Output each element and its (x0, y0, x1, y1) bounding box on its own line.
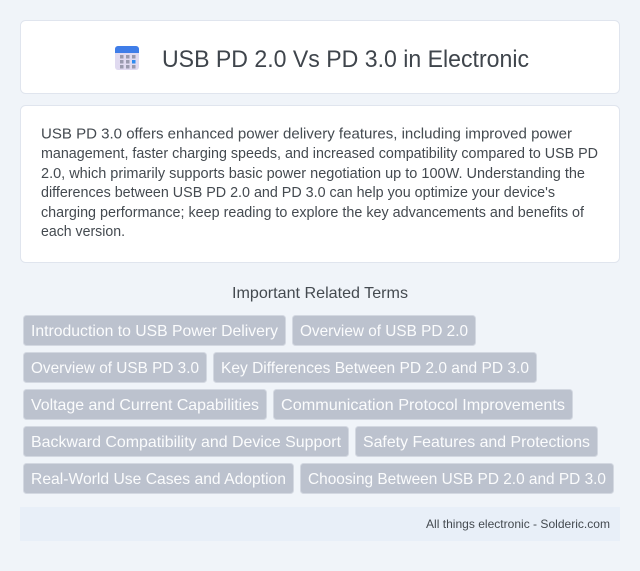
term chip: Choosing Between USB PD 2.0 and PD 3.0 (308, 471, 606, 488)
terms list (24, 316, 614, 494)
term chip (24, 426, 348, 456)
summary text (41, 126, 598, 240)
term chip: Introduction to USB Power Delivery (31, 323, 278, 340)
term chip: Communication Protocol Improvements (281, 397, 565, 414)
term chip (214, 352, 536, 382)
summary text: each version. (41, 224, 125, 240)
term chip (292, 316, 476, 346)
term chip (24, 352, 206, 382)
term chip: Overview of USB PD 3.0 (31, 360, 199, 377)
term chip (24, 464, 294, 494)
summary text: USB PD 3.0 offers enhanced power delivery features, including improved power (41, 126, 572, 142)
term chip: Safety Features and Protections (363, 434, 590, 451)
term chip: Real-World Use Cases and Adoption (31, 471, 286, 488)
summary text: differences between USB PD 2.0 and PD 3.0 can help you optimize your device's (41, 185, 555, 201)
summary text: 2.0, which primarily supports basic power negotiation up to 100W. Understanding the (41, 166, 585, 182)
summary text: charging performance; keep reading to explore the key advancements and benefits of (41, 205, 585, 221)
term chip (356, 426, 598, 456)
term chip: Voltage and Current Capabilities (31, 397, 259, 414)
heading: related terms: Important Related Terms (232, 285, 408, 302)
term chip: Overview of USB PD 2.0 (300, 323, 468, 340)
summary text: management, faster charging speeds, and increased compatibility compared to USB PD (41, 146, 598, 162)
title: USB PD 2.0 Vs PD 3.0 in Electronic (162, 46, 529, 73)
term chip: Backward Compatibility and Device Support (31, 434, 342, 451)
title panel (20, 20, 620, 94)
term chip (274, 390, 572, 420)
term chip (300, 464, 614, 494)
footer (20, 507, 620, 541)
term chip (24, 390, 266, 420)
footer credit: All things electronic - Solderic.com (426, 517, 610, 531)
panel: summary (20, 106, 620, 262)
term chip: Key Differences Between PD 2.0 and PD 3.0 (221, 360, 529, 377)
term chip (24, 316, 286, 346)
icon: calendar grid (115, 46, 139, 70)
